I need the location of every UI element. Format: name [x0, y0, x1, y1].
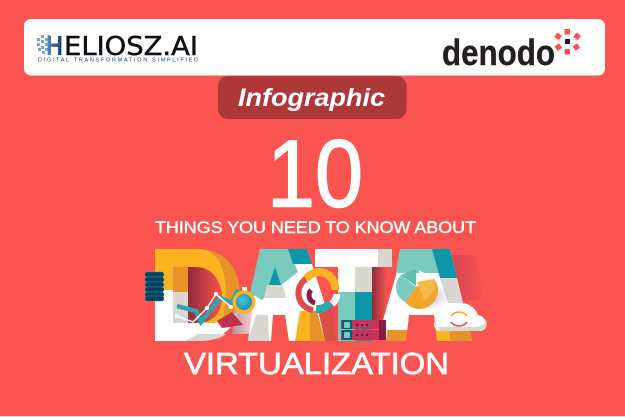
- title number: 10: 10: [267, 120, 363, 228]
- subtitle: THINGS YOU NEED TO KNOW ABOUT: [155, 218, 476, 237]
- letter A (first): [232, 249, 337, 341]
- icon: pie chart: [396, 269, 438, 309]
- illustrated word: DATA: [145, 249, 487, 341]
- icon: line chart with magnifier: [175, 287, 256, 328]
- badge: Infographic: [218, 76, 406, 119]
- icon: server rack: [341, 320, 386, 340]
- logo bar: [24, 19, 605, 76]
- letter A (second): [383, 249, 472, 341]
- logo: denodo: denodo: [442, 32, 555, 73]
- logo: Heliosz.ai: ELIOSZ.AI: [64, 32, 198, 62]
- icon: ring chart: [298, 272, 337, 310]
- subtitle: Virtualization: VIRTUALIZATION: [184, 346, 449, 381]
- logo: Heliosz.ai: DIGITAL TRANSFORMATION SIMPLIFIED: [38, 58, 198, 64]
- logo: Heliosz.ai: H: [46, 30, 63, 61]
- letter D: [155, 249, 240, 341]
- icon: cloud: [434, 303, 487, 331]
- letter shadows: [326, 255, 485, 341]
- icon: database: [145, 272, 164, 301]
- badge: Infographic: Infographic: [238, 84, 385, 112]
- letter T: [315, 249, 392, 341]
